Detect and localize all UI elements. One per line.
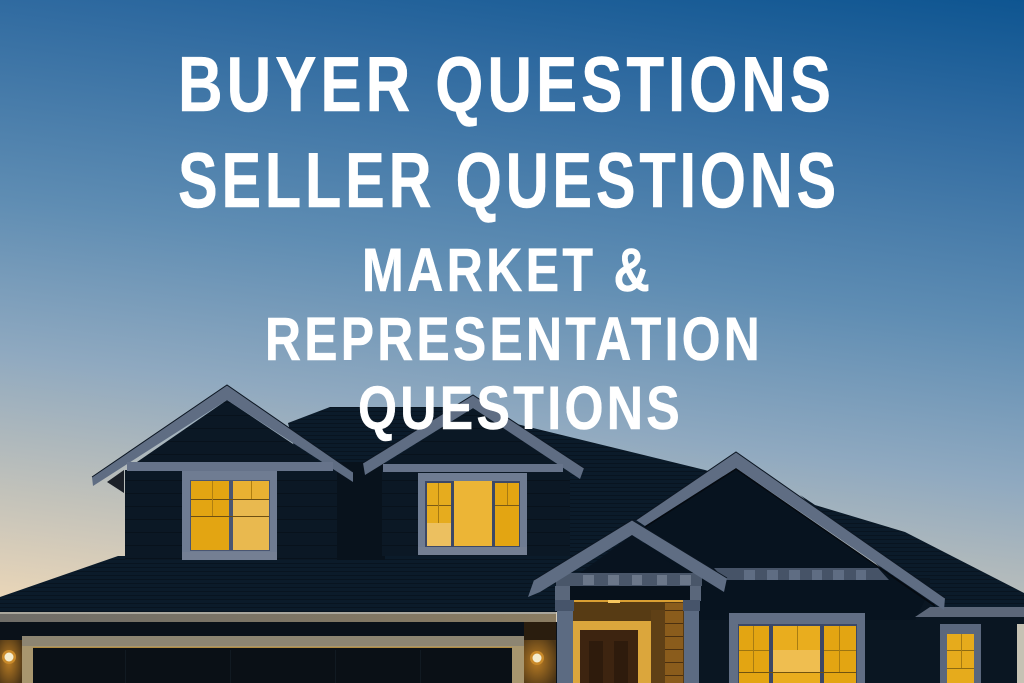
centre dormer window: [418, 473, 527, 555]
heading: seller questions: SELLER QUESTIONS: [178, 136, 840, 224]
garage door: [22, 636, 524, 683]
centre dormer: [363, 395, 584, 556]
heading: market and representation questions: REPRESENTATION: [265, 305, 763, 373]
heading: market and representation questions: QUESTIONS: [358, 374, 683, 442]
back roofs: [0, 407, 1024, 612]
porch frieze blocks: [583, 575, 691, 585]
illustration: house: [0, 385, 1024, 683]
centre connection wall: [335, 462, 385, 560]
large front window: [729, 613, 865, 683]
small right window: [940, 624, 981, 683]
heading: buyer questions: BUYER QUESTIONS: [178, 40, 835, 128]
heading: market and representation questions: [265, 236, 763, 442]
decorative frieze: [714, 568, 889, 580]
left dormer window: [182, 471, 277, 560]
main gable: [636, 452, 1024, 683]
heading: market and representation questions: MARKET &: [362, 236, 653, 304]
wall lamp right: [530, 651, 544, 665]
left dormer: [92, 385, 353, 560]
right wing wall: [690, 578, 1024, 683]
front door: [573, 621, 651, 683]
porch gable: [528, 520, 727, 597]
porch: [555, 535, 702, 683]
wall lamp left: [2, 650, 16, 664]
lower wall: [0, 612, 557, 683]
